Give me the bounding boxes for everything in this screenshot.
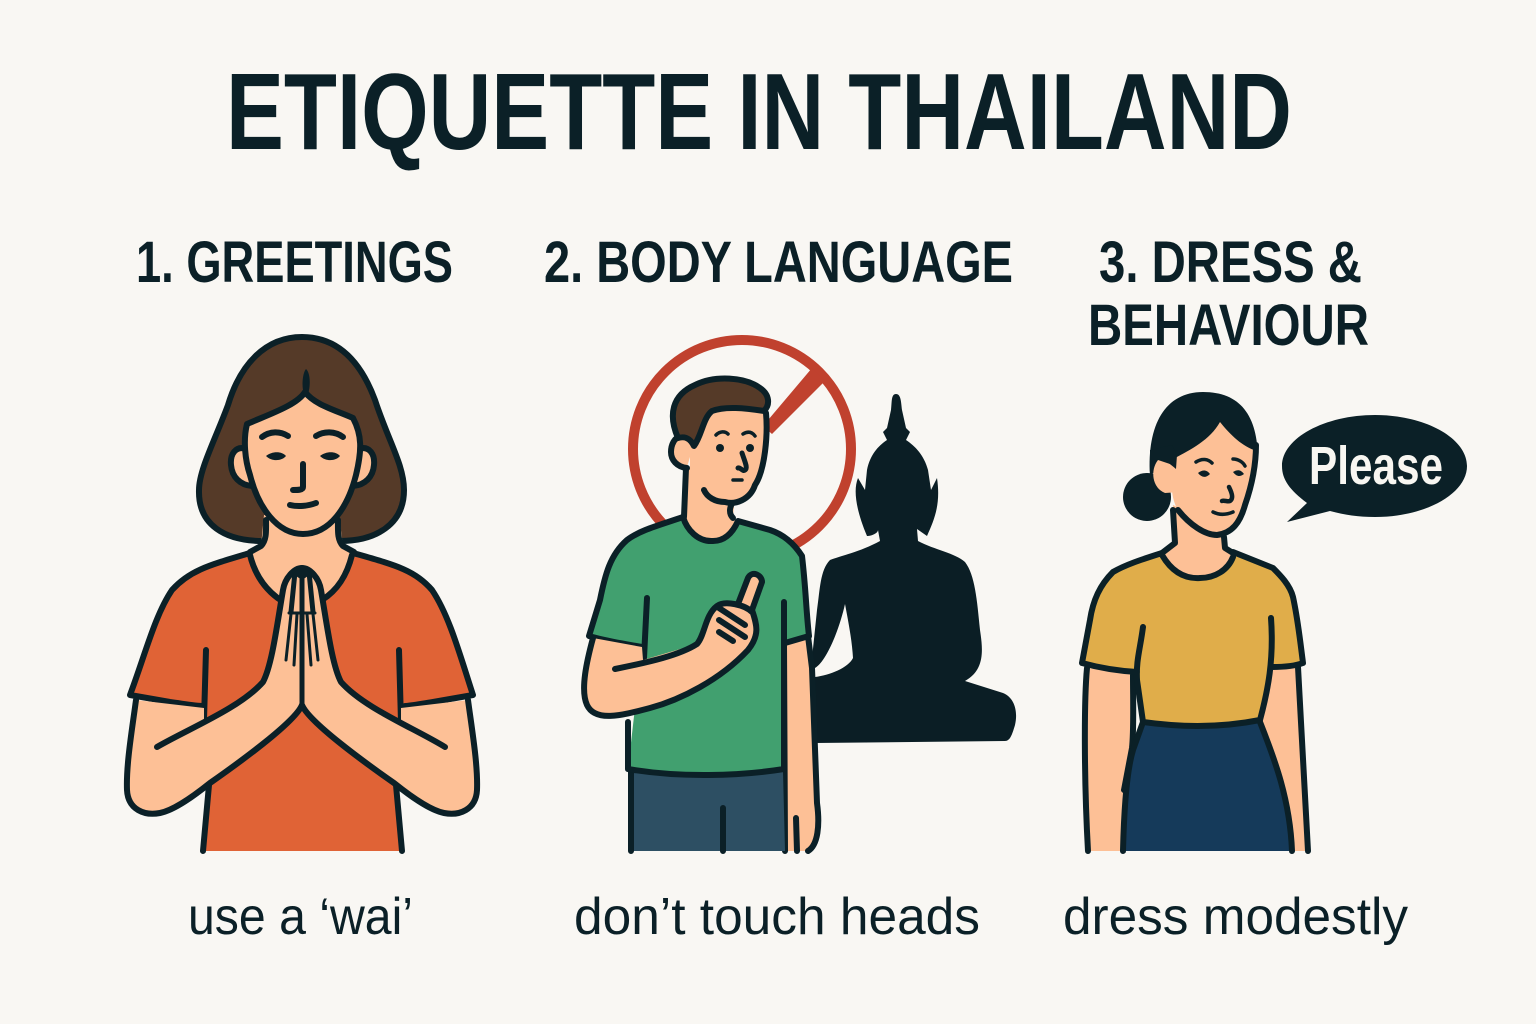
- right arm: [785, 636, 819, 851]
- ear: [671, 438, 695, 467]
- caption: use a wai: use a ‘wai’: [188, 888, 413, 946]
- buddha silhouette: [811, 394, 1016, 743]
- hair wisp: [1150, 445, 1177, 470]
- ear: [1153, 460, 1180, 493]
- neck: [1160, 505, 1235, 580]
- figure: woman in modest dress: [1082, 392, 1308, 851]
- heading: body language: 2. BODY LANGUAGE: [544, 230, 1013, 295]
- heading: dress and behaviour: [1088, 230, 1369, 358]
- face: [690, 407, 766, 503]
- figure: woman giving a wai: [127, 337, 477, 851]
- caption: don't touch heads: don’t touch heads: [574, 888, 980, 946]
- figure: man with raised finger: [584, 379, 819, 851]
- neck: [249, 515, 354, 602]
- facial features: [1196, 459, 1245, 514]
- facial features: [716, 432, 755, 480]
- hair: [673, 379, 768, 446]
- heading: dress and behaviour: 3. DRESS &: [1099, 230, 1362, 295]
- hair: [199, 337, 404, 541]
- face: [1172, 422, 1255, 535]
- shirt: [130, 553, 473, 851]
- caption: dress modestly: dress modestly: [1063, 888, 1408, 946]
- no symbol: [633, 340, 851, 558]
- hair parting: [303, 369, 310, 394]
- shirt: [1082, 552, 1303, 726]
- heading: greetings: 1. GREETINGS: [136, 230, 453, 295]
- hair bun: [1123, 473, 1171, 521]
- ears: [231, 448, 374, 486]
- hair: [1150, 392, 1258, 475]
- left arm: [584, 574, 762, 716]
- shirt: [589, 517, 808, 775]
- skirt: [1123, 720, 1292, 851]
- speech bubble: [1282, 415, 1467, 522]
- left arm and hand: [127, 568, 302, 814]
- title: ETIQUETTE IN THAILAND: [226, 51, 1292, 173]
- neck: [682, 465, 739, 543]
- arms: [1085, 664, 1307, 851]
- right arm and hand: [302, 568, 477, 814]
- finger lines: [286, 565, 318, 705]
- face: [245, 392, 360, 534]
- speech bubble: Please: [1309, 436, 1443, 496]
- trousers: [631, 772, 785, 851]
- heading: dress and behaviour: BEHAVIOUR: [1088, 293, 1369, 358]
- facial features: [262, 432, 343, 506]
